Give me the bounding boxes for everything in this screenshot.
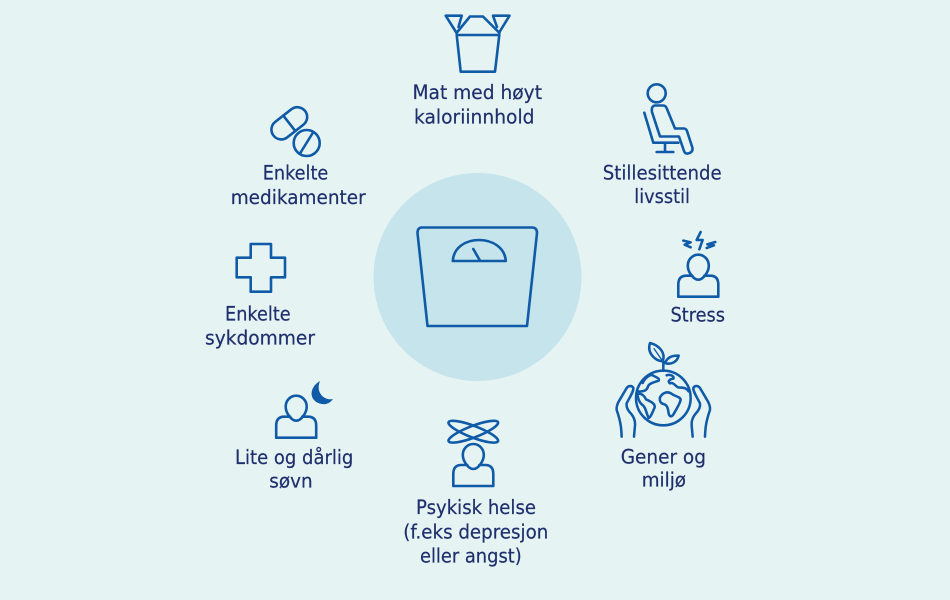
label: [412, 81, 542, 128]
icon: takeaway box: [446, 16, 510, 72]
icon: person with orbiting rings: [446, 417, 500, 486]
label: Lite og dårlig: [235, 446, 353, 469]
person: [276, 396, 316, 438]
label: Psykisk helse: [416, 496, 536, 519]
icon: hands holding globe with plant: [617, 343, 710, 437]
label: Gener og: [621, 445, 706, 468]
icon: pills: [268, 103, 320, 156]
factor: mental health: [403, 417, 548, 568]
icon: person with moon: [276, 381, 333, 438]
label: [231, 161, 367, 209]
label: [403, 496, 548, 568]
moon: [312, 381, 333, 404]
lightning bolts: [683, 232, 715, 249]
factor: stress: [670, 232, 725, 327]
icon: person with lightning: [678, 232, 718, 297]
label: livsstil: [634, 185, 690, 208]
factor: sedentary lifestyle: [603, 84, 722, 208]
person: [453, 444, 493, 486]
label: søvn: [269, 469, 313, 492]
factor: genes and environment: [617, 343, 710, 492]
label: Enkelte: [263, 161, 328, 184]
label: Enkelte: [225, 303, 291, 326]
label: [205, 303, 316, 349]
factor: certain diseases: [205, 244, 316, 349]
icon: bathroom scale: [418, 228, 537, 326]
label: miljø: [642, 469, 686, 492]
central circle with scale: [374, 173, 582, 381]
icon: medical cross: [237, 244, 285, 292]
icon: seated person: [644, 84, 693, 154]
label: [603, 161, 722, 208]
label: Mat med høyt: [412, 81, 542, 104]
label: sykdommer: [205, 326, 316, 349]
label: Stress: [670, 304, 725, 327]
factor: certain medications: [231, 103, 367, 209]
orbit rings: [446, 417, 500, 447]
label: kaloriinnhold: [414, 105, 534, 128]
person: [678, 255, 718, 297]
factor: poor sleep: [235, 381, 353, 492]
label: [621, 445, 706, 492]
label: [235, 446, 353, 492]
circle: [374, 173, 582, 381]
factor: high-calorie food: [412, 16, 542, 128]
label: Stillesittende: [603, 161, 722, 184]
label: medikamenter: [231, 186, 367, 209]
label: (f.eks depresjon: [403, 520, 548, 543]
label: eller angst): [420, 545, 522, 568]
